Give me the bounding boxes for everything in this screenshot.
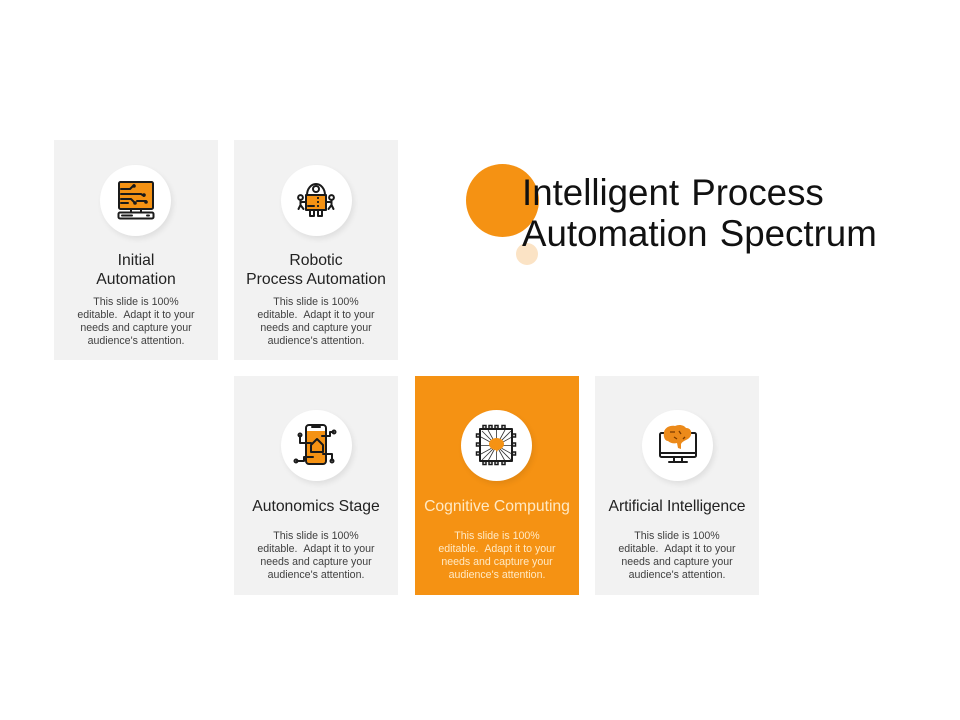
body text: needs and capture your (80, 322, 192, 334)
body text: This slide is 100% (93, 296, 179, 308)
icon: monitor with brain (642, 410, 713, 481)
body text: audience's attention. (268, 569, 364, 581)
icon: chip with brain (461, 410, 532, 481)
heading: Artificial Intelligence (609, 498, 745, 515)
panel: cognitive computing (415, 376, 579, 595)
body text: editable. Adapt it to your (257, 309, 375, 321)
title: Automation Spectrum (522, 212, 877, 254)
body text: needs and capture your (260, 556, 372, 568)
body text: audience's attention. (629, 569, 725, 581)
body text: editable. Adapt it to your (618, 543, 736, 555)
body text: needs and capture your (441, 556, 553, 568)
body text (438, 530, 556, 581)
heading: Robotic (289, 252, 343, 269)
decorative large orange circle (466, 164, 539, 237)
panel: initial automation (54, 140, 218, 360)
body text: This slide is 100% (273, 530, 359, 542)
decorative small peach circle (516, 243, 538, 265)
body text (257, 296, 375, 347)
body text: audience's attention. (88, 335, 184, 347)
title (522, 172, 877, 254)
body text: audience's attention. (268, 335, 364, 347)
body text: This slide is 100% (273, 296, 359, 308)
body text (257, 530, 375, 581)
body text: editable. Adapt it to your (257, 543, 375, 555)
panel: artificial intelligence (595, 376, 759, 595)
heading: Cognitive Computing (424, 498, 570, 515)
body text: needs and capture your (260, 322, 372, 334)
heading (246, 252, 386, 288)
heading: Autonomics Stage (252, 498, 380, 515)
heading: Process Automation (246, 271, 386, 288)
body text (77, 296, 195, 347)
body text: editable. Adapt it to your (77, 309, 195, 321)
panel: robotic process automation (234, 140, 398, 360)
body text: This slide is 100% (634, 530, 720, 542)
body text: audience's attention. (449, 569, 545, 581)
title: Intelligent Process (522, 172, 824, 213)
heading: Initial (118, 252, 154, 269)
heading (96, 252, 176, 288)
body text (618, 530, 736, 581)
body text: This slide is 100% (454, 530, 540, 542)
icon: smartphone with home circuit (281, 410, 352, 481)
icon: robot (281, 165, 352, 236)
body text: needs and capture your (621, 556, 733, 568)
icon: computer with circuit (100, 165, 171, 236)
heading: Automation (96, 271, 176, 288)
panel: autonomics stage (234, 376, 398, 595)
body text: editable. Adapt it to your (438, 543, 556, 555)
